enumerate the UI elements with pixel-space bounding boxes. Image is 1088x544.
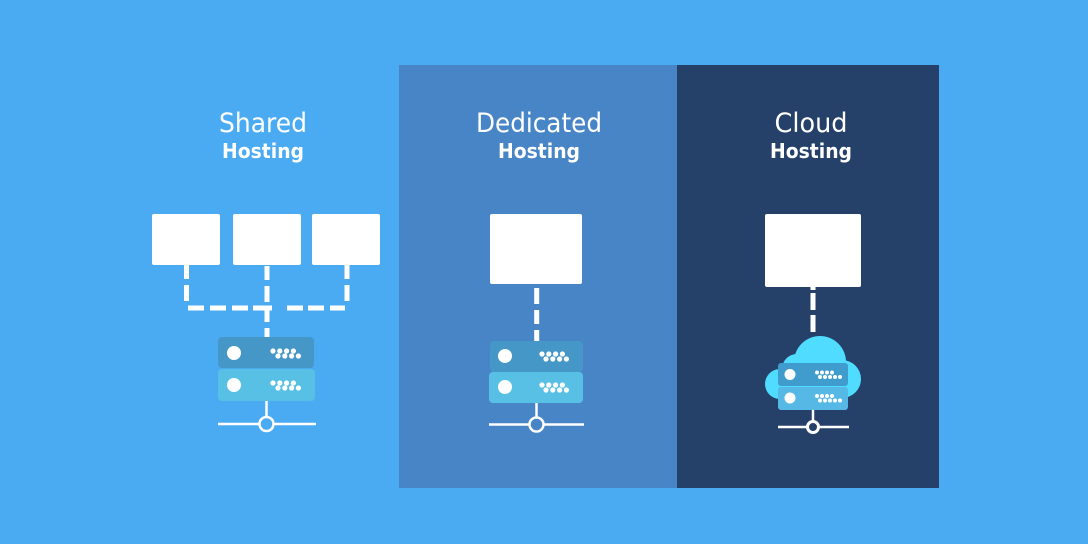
- heading: dedicated hosting: [476, 108, 602, 163]
- dashed connector: [534, 288, 539, 342]
- heading: shared hosting: Shared: [219, 108, 307, 139]
- panel: dedicated hosting: [399, 65, 677, 488]
- heading: dedicated hosting: Hosting: [498, 139, 580, 163]
- heading: cloud hosting: Hosting: [770, 139, 852, 163]
- heading: shared hosting: [219, 108, 307, 163]
- dashed connector: [810, 287, 816, 332]
- dashed connectors: [186, 265, 347, 337]
- heading: dedicated hosting: Dedicated: [476, 108, 602, 139]
- heading: cloud hosting: Cloud: [774, 108, 848, 139]
- heading: cloud hosting: [770, 108, 852, 163]
- client box: [490, 214, 582, 284]
- network node: [489, 403, 584, 432]
- network node: [218, 401, 316, 431]
- panel: cloud hosting: [677, 65, 939, 488]
- client box: [765, 214, 861, 287]
- server stack: [218, 337, 315, 401]
- network node: [778, 410, 849, 432]
- panel: shared hosting: [152, 108, 380, 431]
- server stack: [489, 341, 583, 403]
- icon: cloud: [765, 336, 861, 399]
- heading: shared hosting: Hosting: [222, 139, 304, 163]
- server stack: [778, 363, 848, 410]
- client boxes: [152, 214, 380, 265]
